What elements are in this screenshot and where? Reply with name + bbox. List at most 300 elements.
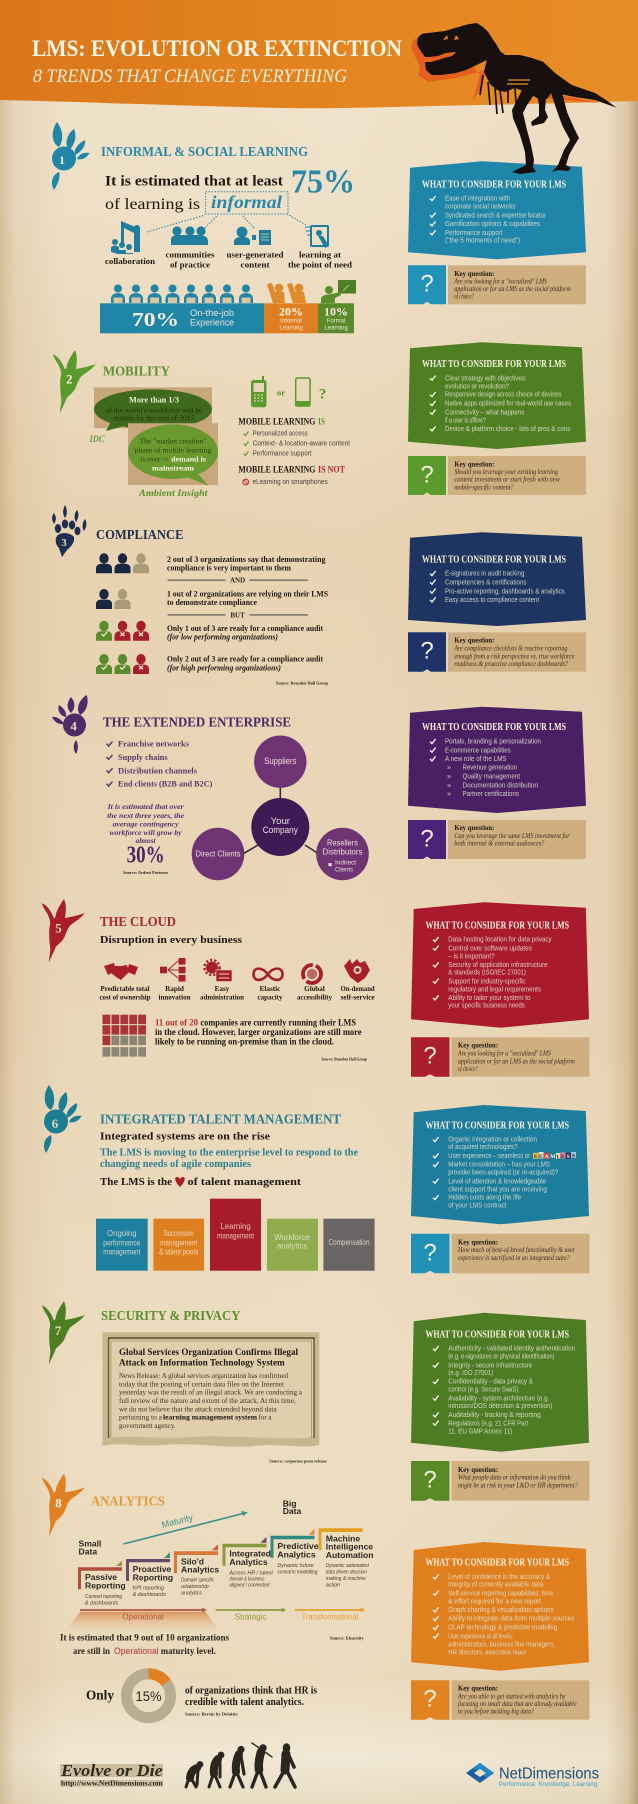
source: Source: Ardent Partners — [123, 871, 169, 875]
band: operational: Operational — [122, 1612, 164, 1621]
bullet list: Ease of integration with — [445, 194, 510, 203]
key question 8: ? — [423, 1686, 437, 1713]
key question 3: ? — [420, 638, 434, 665]
source: Source: Bersin by Deloitte — [185, 1712, 238, 1716]
check list: Distribution channels — [118, 765, 198, 775]
benefit labels: accessibility — [297, 994, 332, 1002]
key question 7: might be at risk in your L&D or HR department? — [458, 1481, 578, 1489]
clipping headline: Attack on Information Technology System — [119, 1358, 285, 1368]
stacked bar: 70-20-10: Formal — [327, 319, 345, 325]
bullet list — [430, 569, 565, 604]
block: learning management — [210, 1199, 261, 1271]
section 7: security and privacy — [42, 1301, 327, 1464]
heading: ANALYTICS — [91, 1494, 165, 1509]
bullet list: Gamification options & capabilities — [445, 219, 540, 228]
icon: communities of practice — [171, 226, 208, 245]
header banner — [0, 0, 638, 108]
icon: paw 6 — [44, 1085, 82, 1153]
bullet list: – is it important? — [448, 951, 495, 960]
bullet list: E-commerce capabilities — [445, 745, 511, 754]
heading: INFORMAL & SOCIAL LEARNING — [101, 144, 308, 159]
statistic: contingency workforce — [107, 802, 185, 869]
step 1: passive reporting: Passive — [85, 1572, 117, 1582]
step 4: integrated analytics — [222, 1537, 273, 1589]
heading: SECURITY & PRIVACY — [101, 1308, 241, 1323]
panel: consider 3 — [408, 532, 586, 626]
block: performance management: performance — [103, 1238, 140, 1247]
step 1: passive reporting: & dashboards — [85, 1600, 119, 1606]
subtitle: 8 TRENDS THAT CHANGE EVERYTHING — [33, 66, 347, 87]
divider label: but: BUT — [230, 611, 245, 619]
key question 1: application or for an LMS as the social platform — [454, 285, 571, 293]
key question 3: readiness & proactive compliance dashboards? — [454, 660, 568, 668]
bullet list: Self-service reporting capabilities, time — [448, 1588, 553, 1597]
statement: low performers: (for low performing organizations) — [167, 632, 278, 642]
bullet list: Confidentiality - data privacy & — [448, 1377, 533, 1386]
key question 1: Key question: — [454, 270, 494, 278]
text: mobile learning is not: eLearning on smartphones — [253, 477, 328, 486]
benefit labels: Elastic — [260, 985, 281, 993]
statement: high performers — [167, 654, 323, 672]
band: strategic — [216, 1608, 286, 1621]
step 2: proactive reporting: Proactive — [133, 1564, 172, 1574]
node: direct clients — [192, 828, 244, 880]
bullet list: provider been acquired (or re-acquired)? — [448, 1168, 558, 1177]
step 5: predictive analytics: Predictive — [277, 1541, 319, 1551]
bullet list: Syndicated search & expertise locator — [445, 210, 546, 219]
icon: handshake — [104, 963, 138, 980]
text: mobile learning is not — [238, 465, 346, 486]
benefit labels: Predictable total — [100, 985, 150, 993]
step 3: silo'd analytics: relationship — [181, 1584, 209, 1590]
stacked bar: 70-20-10: Informal — [280, 319, 302, 325]
bullet list: Hidden costs along the life — [448, 1193, 521, 1202]
statistic: 9 of 10: maturity level. — [161, 1646, 216, 1657]
icon: globe — [303, 965, 321, 983]
bullet list: client support that you are receiving — [448, 1184, 547, 1193]
icon: feature phone or smartphone — [251, 376, 326, 407]
step 2: proactive reporting — [126, 1552, 173, 1598]
icon: claw 2 — [53, 350, 96, 413]
key question 4: Key question: — [454, 824, 494, 832]
clipping body: we do not believe that the attack extended beyond data — [119, 1404, 277, 1413]
check list: Franchise networks — [118, 739, 190, 749]
bullet list: Quality management — [462, 771, 520, 780]
icon: tree — [160, 958, 186, 982]
source: Source: Brandon Hall Group — [321, 1057, 367, 1061]
block: workforce analytics — [267, 1219, 318, 1271]
ransom-note word: seamless: S — [572, 1154, 575, 1160]
label: small data: Data — [78, 1547, 97, 1557]
panel: consider 5 — [411, 902, 589, 1028]
step 3: silo'd analytics: Domain specific — [181, 1578, 214, 1584]
section 8: analytics — [42, 1474, 374, 1718]
bullet list: Pro-active reporting, dashboards & analytics — [445, 586, 565, 595]
label: small data: Small — [78, 1538, 101, 1548]
statement: low performers: Only 1 out of 3 are ready for a compliance audit — [167, 623, 323, 633]
clipping body: pertaining to a — [119, 1413, 163, 1422]
people row: 1 of 2 — [96, 589, 130, 609]
bullet list: User experience – seamless or — [448, 1151, 531, 1160]
bullet list: A new role of the LMS — [445, 754, 507, 763]
clipping headline — [119, 1348, 298, 1368]
panel title: WHAT TO CONSIDER FOR YOUR LMS — [426, 1119, 569, 1131]
key question 3: enough from a risk perspective vs. true workforce — [454, 652, 574, 660]
key question 6: experience is sacrificed in an integrated suite? — [458, 1254, 570, 1262]
callout: IDC speech bubble: mobile by the end of 2015 — [114, 413, 195, 422]
bullet list: Easy access to compliance content — [445, 595, 539, 604]
bullet list: Ability to tailor your system to — [448, 993, 530, 1002]
key question 5: application or for an LMS as the social platform — [458, 1057, 575, 1065]
node: resellers and distributors — [316, 828, 369, 880]
icon: claw 5: 5 — [55, 921, 62, 936]
step 2: proactive reporting: & dashboards — [133, 1592, 166, 1598]
node: resellers and distributors: Resellers — [327, 839, 358, 848]
icon labels: collaboration — [105, 257, 156, 266]
statistic: HR credibility: of organizations think that HR is — [185, 1685, 317, 1696]
bullet list: Organic integration or collection — [448, 1135, 537, 1144]
benefit labels: capacity — [258, 994, 283, 1002]
clipping headline: Global Services Organization Confirms Illegal — [119, 1348, 298, 1358]
band: transformational — [295, 1608, 366, 1621]
bullet list: » — [447, 771, 451, 780]
bullet list: Responsive design across choice of devices — [445, 390, 562, 399]
benefit labels: cost of ownership — [100, 994, 150, 1002]
step 5: predictive analytics: Analytics — [277, 1549, 316, 1559]
icon: paw 4: 4 — [70, 719, 77, 734]
label: big data: Data — [283, 1506, 302, 1516]
step 1: passive reporting — [78, 1561, 126, 1606]
statistic text: of learning is — [105, 196, 200, 213]
chart: donut 15%: 15% — [136, 1688, 162, 1704]
statistic: HR credibility: credible with talent analytics. — [185, 1697, 304, 1708]
node: suppliers: Suppliers — [264, 756, 297, 766]
bullet list: Graph charting & visualization options — [448, 1605, 554, 1614]
ransom-note word: seamless — [533, 1152, 576, 1160]
band: operational — [65, 1608, 220, 1632]
text: mobile learning is: Personalized access — [253, 429, 308, 438]
bullet list: Security of application infrastructure — [448, 960, 548, 969]
step 6: machine intelligence automation: making & machine — [326, 1576, 366, 1582]
icon labels: user-generated — [226, 250, 284, 259]
key question 6: Key question: — [458, 1238, 498, 1246]
logo: NetDimensions — [466, 1763, 599, 1788]
block: performance management: management — [103, 1247, 141, 1256]
bullet list: E-signatures in audit tracking — [445, 569, 524, 578]
heading: COMPLIANCE — [96, 527, 184, 542]
band: transformational: Transformational — [302, 1612, 359, 1621]
icon: claw 7: 7 — [55, 1323, 62, 1338]
block: performance management: Ongoing — [107, 1229, 137, 1238]
block: workforce analytics: analytics — [277, 1242, 307, 1251]
people row: high performers — [96, 654, 149, 674]
panel title: WHAT TO CONSIDER FOR YOUR LMS — [422, 721, 566, 733]
bullet list: Revenue generation — [462, 763, 517, 772]
icon: claw 8 — [42, 1474, 85, 1537]
step 6: machine intelligence automation: Dynamic automated — [326, 1563, 370, 1569]
step 5: predictive analytics — [270, 1529, 319, 1575]
statement: 2 of 3: 2 out of 3 organizations say that demonstrating — [167, 554, 326, 564]
bullet list: evolution or revolution? — [445, 381, 509, 390]
bullet list: Competencies & certifications — [445, 577, 527, 586]
bullet list: 11, EU GMP Annex 11) — [448, 1426, 512, 1435]
panel title: WHAT TO CONSIDER FOR YOUR LMS — [422, 358, 566, 370]
statistic text: informal — [211, 192, 282, 212]
arrow: maturity — [123, 1511, 248, 1544]
bullet list: Availability - system architecture (e.g. — [448, 1393, 549, 1402]
statement: high performers: Only 2 out of 3 are ready for a compliance audit — [167, 654, 323, 664]
bullet list: Clear strategy with objectives: — [445, 373, 526, 382]
panel title: WHAT TO CONSIDER FOR YOUR LMS — [426, 919, 569, 931]
statement: 1 of 2: to demonstrate compliance — [167, 597, 257, 607]
stacked bar: 70-20-10: On-the-job — [190, 308, 234, 318]
source: IDC: IDC — [89, 434, 105, 444]
key question 5: Key question: — [458, 1042, 498, 1050]
stacked bar: 70-20-10: 70% — [132, 309, 179, 331]
title: LMS: EVOLUTION OR EXTINCTION — [32, 36, 402, 61]
benefit labels: administration — [200, 994, 244, 1002]
panel title: WHAT TO CONSIDER FOR YOUR LMS — [426, 1557, 569, 1569]
icon: claw 7 — [42, 1301, 85, 1364]
bullet list: Market consolidation – has your LMS — [448, 1160, 550, 1169]
icon labels: content — [240, 261, 270, 270]
bullet list: Connectivity – what happens — [445, 407, 525, 416]
icon labels — [105, 250, 353, 270]
source: Ambient Insight: Ambient Insight — [138, 489, 208, 499]
key question 4: ? — [420, 825, 434, 852]
footer: evolve or die: http://www.NetDimensions.com — [61, 1780, 163, 1788]
step 6: machine intelligence automation — [318, 1528, 374, 1588]
benefit labels: Rapid — [165, 985, 184, 993]
icon labels: communities — [166, 250, 214, 259]
panel title: WHAT TO CONSIDER FOR YOUR LMS — [426, 1329, 569, 1341]
node: resellers and distributors: Clients — [335, 866, 353, 873]
bullet list: (e.g. e-signatures or physical identification) — [448, 1352, 554, 1361]
icon labels: learning at — [299, 250, 341, 259]
clipping body — [119, 1371, 303, 1430]
step 4: integrated analytics: aligned / connected — [229, 1583, 270, 1589]
statistic text: in the cloud. However, larger organizations are still more — [155, 1027, 362, 1037]
key question 1: of choice? — [454, 293, 474, 301]
step 4: integrated analytics: domain & business — [229, 1576, 265, 1582]
icon: paw 1 — [52, 122, 90, 190]
step 1: passive reporting: Canned reporting — [85, 1594, 122, 1600]
statistic text: companies are currently running their LMS — [200, 1017, 356, 1027]
footer: evolve or die — [60, 1761, 163, 1788]
step 3: silo'd analytics: Silo'd — [181, 1556, 204, 1566]
callout: Ambient Insight speech bubble — [128, 423, 218, 486]
step 4: integrated analytics: Across HR / talent — [228, 1570, 273, 1576]
bullet list: Auditability - tracking & reporting — [448, 1410, 541, 1419]
callout: IDC speech bubble: More than 1/3 — [129, 395, 179, 405]
statement: 2 of 3 — [167, 554, 326, 572]
icon labels: the point of need — [288, 261, 353, 270]
heading: THE EXTENDED ENTERPRISE — [103, 714, 291, 729]
statistic: 9 of 10: It is estimated that 9 out of 10 organizations — [60, 1633, 229, 1644]
key question 8: Key question: — [458, 1685, 498, 1693]
check list: End clients (B2B and B2C) — [118, 779, 212, 789]
callout: IDC speech bubble: of the world's workforce will be — [106, 406, 203, 415]
icon: claw 5 — [42, 899, 85, 962]
step 6: machine intelligence automation: Intelligence — [326, 1542, 373, 1552]
bullet list: » — [447, 789, 451, 798]
people: informal learners with raised hands — [267, 283, 306, 303]
footer: evolve or die: Evolve or Die — [60, 1761, 163, 1780]
key question 6 — [411, 1234, 590, 1273]
key question 5: ? — [423, 1043, 437, 1070]
people row: low performers — [96, 621, 149, 641]
statistic text: It is estimated that at least — [105, 174, 283, 190]
icon: infinity — [254, 969, 282, 980]
bullet list: (e.g. ISO 27001) — [448, 1368, 493, 1377]
block: succession management: & talent pools — [159, 1247, 198, 1256]
bullet list: Authenticity - validated identity authentication — [448, 1344, 575, 1353]
divider label: and: AND — [230, 576, 245, 584]
bullet list: your specific business needs — [448, 1001, 525, 1010]
text: mobile learning is: MOBILE LEARNING — [238, 417, 315, 427]
label: only: Only — [86, 1688, 114, 1703]
step 2: proactive reporting: Reporting — [133, 1572, 173, 1582]
icon: claw 8: 8 — [55, 1496, 62, 1511]
bullet list — [433, 935, 552, 1010]
section 6: integrated talent management — [44, 1085, 375, 1271]
statement: 1 of 2 — [167, 589, 328, 607]
icon: feature phone or smartphone: or — [277, 388, 285, 398]
bullet list: Documentation distribution — [462, 780, 538, 789]
key question 8 — [411, 1680, 590, 1720]
bullet list — [433, 1135, 558, 1209]
check list — [106, 739, 212, 789]
step 5: predictive analytics: Dynamic future — [277, 1563, 314, 1569]
node: direct clients: Direct Clients — [196, 849, 240, 858]
stacked bar: 70-20-10: Learning — [279, 326, 303, 332]
step 6: machine intelligence automation: action — [326, 1582, 340, 1588]
bullet list: Data hosting location for data privacy — [448, 935, 552, 944]
key question 8: Are you able to get started with analytics by — [457, 1692, 566, 1700]
block: succession management: Succession — [164, 1229, 194, 1238]
panel: consider 2 — [408, 342, 586, 449]
subheading: Integrated systems are on the rise — [100, 1130, 270, 1142]
bullet list — [433, 1344, 575, 1435]
bullet list: Regulations (e.g. 21 CFR Part — [448, 1418, 528, 1427]
panel: consider 4 — [408, 707, 586, 813]
section 3: compliance — [52, 505, 328, 686]
benefit labels: self-service — [341, 994, 375, 1002]
statistic text: 75% — [291, 164, 355, 201]
statistic: 9 of 10: Operational — [114, 1646, 159, 1657]
heading: MOBILITY — [103, 364, 170, 379]
statistic text — [105, 164, 355, 232]
clipping body: yesterday was the result of an illegal attack. We are conducting a — [119, 1388, 303, 1397]
bullet list: intrusion/DOS detection & prevention) — [448, 1401, 552, 1410]
stacked bar: 70-20-10: 10% — [324, 307, 348, 319]
statement: 2 of 3: compliance is very important to them — [167, 562, 292, 572]
bullet list — [430, 373, 571, 433]
key question 1: Are you looking for a "socialized" LMS — [454, 277, 547, 285]
stacked bar: 70-20-10 — [100, 303, 354, 333]
heart statement: of talent management — [188, 1176, 301, 1188]
clipping body: learning management system — [163, 1413, 258, 1422]
key question 3: Are compliance checklists & reactive reporting — [454, 645, 568, 653]
panel: consider 6 — [411, 1105, 589, 1224]
block: workforce analytics: Workforce — [274, 1233, 310, 1242]
bullet list: corporate social networks — [445, 202, 516, 211]
key question 1 — [408, 265, 586, 304]
statistic: 9 of 10 — [60, 1633, 229, 1657]
icon: learning at the point of need — [305, 226, 329, 248]
logo: NetDimensions: NetDimensions — [499, 1766, 599, 1783]
clipping body: today that the posting of certain data files on the Internet — [119, 1379, 285, 1388]
step 3: silo'd analytics: Analytics — [181, 1565, 219, 1575]
bullet list: & standards (ISO/IEC 27001) — [448, 968, 526, 977]
step 2: proactive reporting: KPI reporting — [133, 1586, 164, 1592]
bullet list: & effort required for a new report — [448, 1596, 541, 1605]
bullet list: regulatory and legal requirements — [448, 984, 541, 993]
bullet list: Device & platform choice - lots of pros & cons — [445, 424, 571, 433]
people row: 2 of 3 — [96, 553, 149, 573]
bullet list — [430, 737, 541, 798]
statistic: contingency workforce: the next three years, the — [107, 811, 185, 820]
benefit labels — [100, 985, 375, 1002]
key question 2: Key question: — [454, 460, 494, 468]
section 2: mobility — [53, 350, 351, 499]
icon: self-service hand — [344, 959, 370, 983]
step 6: machine intelligence automation: Automation — [326, 1550, 374, 1560]
block: compensation — [323, 1219, 375, 1271]
icon: paw 6: 6 — [52, 1116, 59, 1131]
stacked bar: 70-20-10: Learning — [324, 326, 348, 332]
bullet list: Ability to integrate data from multiple sources — [448, 1614, 575, 1623]
step 4: integrated analytics: Integrated — [229, 1549, 271, 1559]
bullet list: » — [447, 780, 451, 789]
text: mobile learning is: IS — [318, 417, 325, 427]
node: your company — [251, 798, 309, 856]
key question 4: Can you leverage the same LMS investment for — [454, 832, 570, 840]
text block — [100, 1147, 359, 1170]
text block: The LMS is moving to the enterprise level to respond to the — [100, 1147, 359, 1158]
text: mobile learning is not: MOBILE LEARNING — [238, 465, 315, 475]
clipping body: News Release: A global services organization has confirmed — [119, 1371, 288, 1380]
icon: collaboration — [111, 221, 140, 254]
bullet list: of acquired technologies? — [448, 1142, 518, 1151]
ransom-note word: seamless: E — [539, 1154, 543, 1160]
news clipping — [102, 1332, 319, 1447]
step 3: silo'd analytics — [174, 1544, 219, 1596]
bullet list: Level of confidence in the accuracy & — [448, 1572, 550, 1581]
step 6: machine intelligence automation: data driven decision — [326, 1569, 367, 1575]
ransom-note word: seamless: A — [545, 1154, 549, 1160]
step 3: silo'd analytics: analytics — [181, 1590, 202, 1596]
statistic: contingency workforce: 30% — [127, 843, 165, 869]
bullet list: » — [447, 763, 451, 772]
bullet list — [430, 194, 546, 245]
bullet list: Level of attention & knowledgeable — [448, 1176, 546, 1185]
node: your company: Company — [263, 825, 298, 836]
callout: IDC speech bubble — [94, 387, 212, 431]
diagram: your company network — [192, 736, 369, 880]
panel: consider 1 — [408, 161, 586, 259]
icon: t-rex skeleton — [411, 23, 617, 174]
section 5: the cloud — [42, 899, 375, 1061]
key question 7: What people data or information do you think — [458, 1474, 571, 1482]
chart: donut 15% — [126, 1674, 170, 1718]
section 4: the extended enterprise — [52, 695, 369, 880]
bullet list: integrity of currently available data — [448, 1580, 544, 1589]
heading: INTEGRATED TALENT MANAGEMENT — [100, 1112, 341, 1127]
callout: Ambient Insight speech bubble: The "market creation" — [140, 436, 206, 445]
ransom-note word: seamless: S — [534, 1154, 537, 1160]
bullet list: Integrity - secure infrastructure — [448, 1360, 532, 1369]
